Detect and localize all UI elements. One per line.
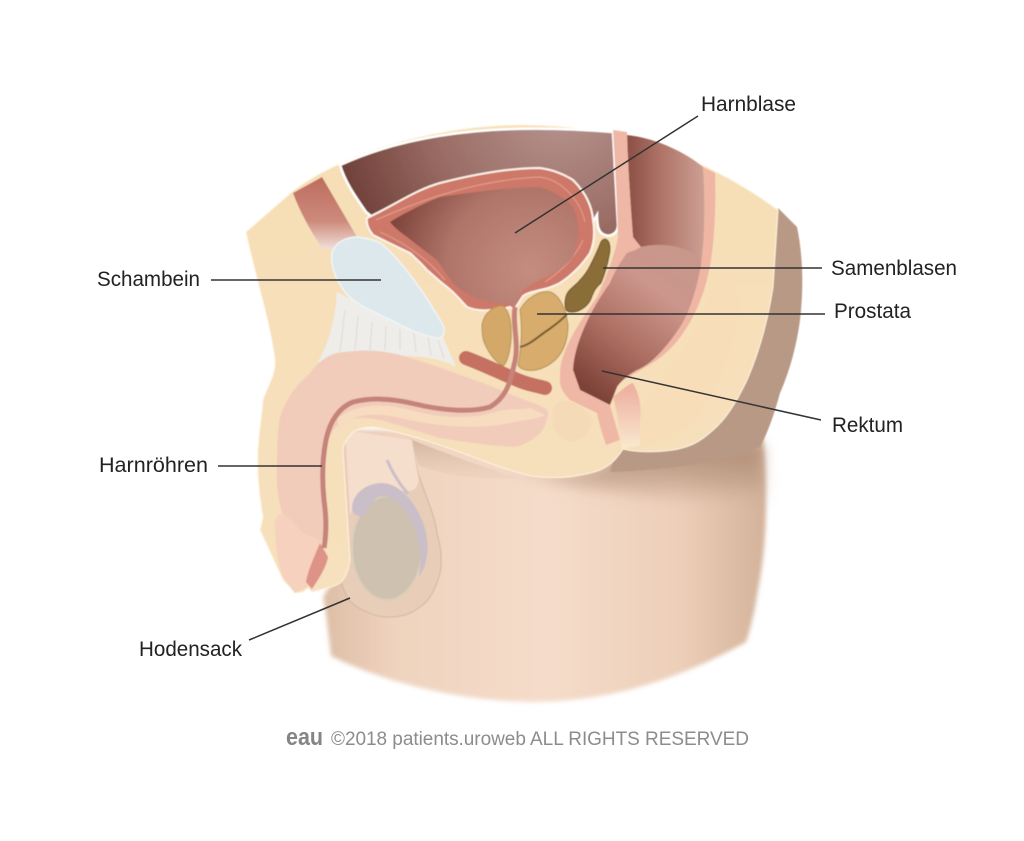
testis (352, 496, 422, 600)
footer copyright: ©2018 patients.uroweb ALL RIGHTS RESERVED (331, 729, 749, 750)
leader line: Harnblase (515, 116, 698, 233)
pubic bone (332, 237, 444, 338)
label: Schambein: Schambein (97, 268, 200, 291)
sphincter muscle (466, 358, 545, 388)
seminal vesicles (565, 239, 610, 312)
label: Prostata: Prostata (834, 300, 911, 323)
leader line: Schambein (211, 279, 381, 281)
penis: corpus pink (277, 351, 548, 545)
rectum upper interior (573, 135, 704, 370)
leader line: Hodensack (249, 598, 350, 640)
illustration: sagittal section of the male pelvis (246, 125, 802, 702)
urethra (323, 307, 516, 548)
label: Samenblasen: Samenblasen (831, 257, 957, 280)
skin shadow under section, left (412, 440, 520, 478)
anal canal (613, 383, 641, 449)
glans (275, 513, 320, 593)
skin shadow under section, right (490, 445, 764, 502)
bladder wall texture (376, 177, 585, 282)
bladder lumen (390, 187, 578, 307)
rectum lower interior (573, 245, 702, 405)
ejaculatory duct (520, 314, 567, 347)
footer logo: eau: eau (286, 724, 323, 751)
abdominal muscle (293, 177, 357, 250)
label: Harnblase: Harnblase (701, 93, 796, 116)
ligament strands (340, 310, 444, 358)
meatus (306, 543, 328, 589)
scrotum (340, 440, 441, 617)
label: Rektum: Rektum (832, 414, 903, 437)
abdominal cavity (340, 129, 618, 260)
label: Harnröhren: Harnröhren (99, 454, 208, 477)
label: Hodensack: Hodensack (139, 638, 242, 661)
leader line: Rektum (602, 371, 821, 420)
section cream tissue (246, 125, 778, 593)
spongy band below urethra (338, 406, 545, 440)
gray ligaments (318, 292, 456, 368)
rectum wall: anterior (560, 130, 641, 445)
perineal bulb (552, 401, 592, 442)
scrotum upper light area (345, 430, 419, 515)
prostate right lobe (518, 292, 568, 370)
epididymis (352, 483, 428, 577)
vas deferens (387, 460, 408, 494)
leader line: Samenblasen (603, 267, 822, 269)
prostate left lobe (482, 306, 511, 366)
rectum wall: posterior (617, 167, 715, 387)
leader line: Harnröhren (218, 465, 322, 467)
buttock cream lobe (640, 260, 740, 445)
lower body skin (323, 430, 766, 702)
leader line: Prostata (537, 313, 825, 315)
right flank (610, 208, 802, 472)
bladder wall (367, 168, 594, 310)
